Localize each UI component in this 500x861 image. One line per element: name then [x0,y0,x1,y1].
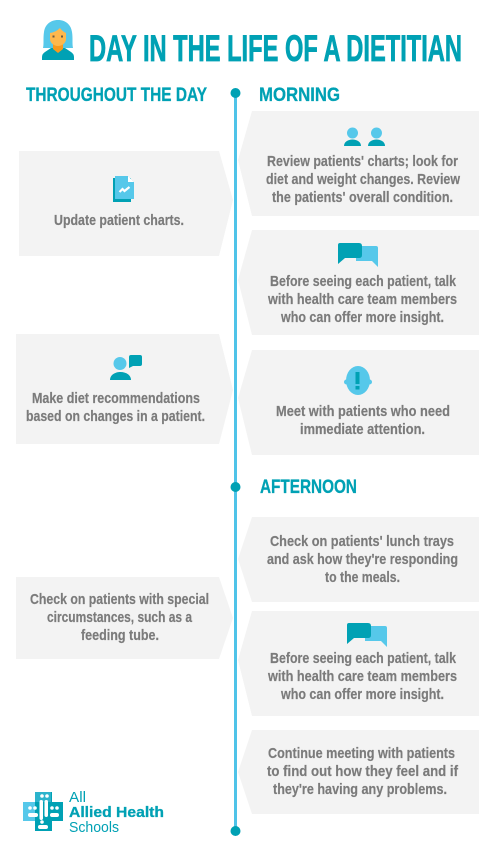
panel: special circumstances: circumstances, such as a [47,609,193,626]
heading: throughout the day: THROUGHOUT THE DAY [26,84,207,106]
timeline [230,88,240,836]
icon: dietitian avatar [42,20,74,60]
panel: special circumstances: feeding tube. [81,627,159,644]
panel: lunch trays: Check on patients' lunch trays [270,533,454,550]
icon: head with exclamation [344,366,372,395]
panel: immediate attention: Meet with patients who need [276,403,450,420]
panel: update patient charts: Update patient charts. [54,212,184,229]
logo wordmark: All [69,789,86,806]
panel: talk with team, morning: who can offer more insight. [280,309,444,326]
logo [23,789,164,836]
icon: logo cross [23,792,63,831]
panel: immediate attention: immediate attention. [300,421,425,438]
heading: afternoon: AFTERNOON [260,476,357,498]
panel: continue meeting: to find out how they feel and if [267,763,459,780]
logo wordmark: Allied Health [69,804,164,821]
panel: review charts: Review patients' charts; look for [267,153,458,170]
panel: special circumstances [16,577,233,659]
logo wordmark [69,789,164,836]
icon: speech bubbles [347,623,387,647]
panel: review charts: diet and weight changes. Review [266,171,460,188]
panel: lunch trays: to the meals. [325,569,400,586]
panel: lunch trays [238,517,479,602]
panel: talk with team, morning: Before seeing each patient, talk [270,273,457,290]
panel: talk with team, afternoon: Before seeing each patient, talk [270,650,457,667]
panel: talk with team, morning [238,230,479,335]
panel: continue meeting [238,730,479,814]
logo wordmark: Schools [69,819,119,836]
panel: continue meeting: Continue meeting with patients [268,745,455,762]
icon: two people [344,128,385,146]
icon: chart document [113,176,134,202]
panel: talk with team, morning: with health care team members [267,291,457,308]
panel: lunch trays: and ask how they're responding [267,551,458,568]
panel: update patient charts [19,151,233,256]
panel: continue meeting: they're having any problems. [273,781,447,798]
panel: review charts [238,111,479,216]
panel: review charts: the patients' overall condition. [272,189,453,206]
icon: person with speech bubble [110,355,142,380]
panel: talk with team, afternoon [238,611,479,716]
panel: diet recommendations: Make diet recommendations [32,390,200,407]
heading: morning: MORNING [259,84,340,106]
panel: diet recommendations: based on changes in a patient. [26,408,205,425]
panel: diet recommendations [16,334,233,444]
panel: talk with team, afternoon: with health care team members [267,668,457,685]
panel: special circumstances: Check on patients with special [30,591,209,608]
icon: speech bubbles [338,243,378,267]
panel: talk with team, afternoon: who can offer more insight. [280,686,444,703]
panel: immediate attention [238,350,479,455]
